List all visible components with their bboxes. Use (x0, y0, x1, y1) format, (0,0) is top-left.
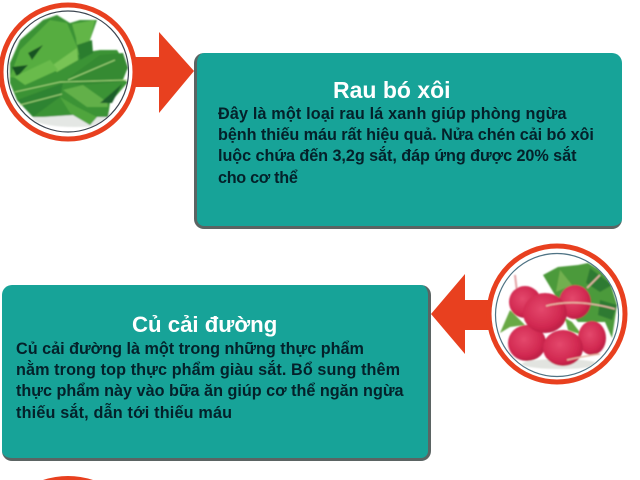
text block: Củ cải đường description (16, 340, 404, 422)
text block: Rau bó xôi description: cho cơ thể (218, 169, 298, 187)
text block: Củ cải đường description: thực phẩm này vào bữa ăn giúp cơ thể ngăn ngừa (16, 382, 404, 400)
text block: Củ cải đường description: thiếu sắt, dẫn tới thiếu máu (16, 404, 232, 422)
icon: next circle, cropped (43, 476, 93, 480)
text block: Rau bó xôi description: bệnh thiếu máu rất hiệu quả. Nửa chén cải bó xôi (218, 126, 594, 144)
text block: Rau bó xôi description: Đây là một loại rau lá xanh giúp phòng ngừa (218, 105, 567, 123)
text block: Củ cải đường description: Củ cải đường là một trong những thực phẩm (16, 340, 364, 358)
text block: Rau bó xôi description (218, 105, 594, 187)
icon: spinach in circle (1, 5, 135, 139)
arrow: left to radish panel (431, 274, 492, 354)
panel: Củ cải đường (2, 285, 431, 461)
text block: Rau bó xôi description: luộc chứa đến 3,2g sắt, đáp ứng được 20% sắt (218, 147, 576, 165)
heading: Rau bó xôi: Rau bó xôi (333, 77, 451, 103)
icon: radishes in circle (489, 246, 625, 382)
panel: Rau bó xôi (194, 53, 622, 229)
arrow: right to spinach panel (132, 32, 194, 113)
text block: Củ cải đường description: nằm trong top thực phẩm giàu sắt. Bổ sung thêm (16, 361, 400, 379)
heading: Củ cải đường: Củ cải đường (132, 312, 277, 337)
